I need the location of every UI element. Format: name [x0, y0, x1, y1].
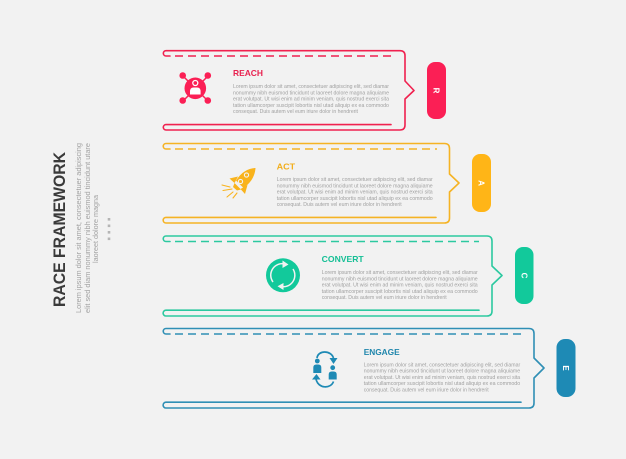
body text: act: erat volutpat. Ut wisi enim ad minim veniam, quis nostrud exerci sita	[277, 190, 434, 196]
icon: cycle arrows	[266, 258, 300, 292]
body text: reach: Lorem ipsum dolor sit amet, consectetuer adipiscing elit, sed diamar	[233, 84, 389, 90]
body text: convert: tation ullamcorper suscipit lobortis nisl utad aliquip ex ea commodo	[322, 289, 478, 295]
icon: rocket	[222, 168, 256, 198]
tab: E: E	[561, 365, 570, 371]
intro text block: Lorem ipsum dolor sit amet, consectetuer adipiscing	[74, 143, 83, 313]
tab: R	[427, 62, 446, 119]
panel: reach	[163, 51, 414, 130]
tab: C	[515, 247, 534, 304]
title: RACE FRAMEWORK	[51, 152, 69, 307]
body text: engage: nonummy nibh euismod tincidunt ut laoreet dolore magna aliquiame	[364, 369, 520, 375]
body text: reach: erat volutpat. Ut wisi enim ad minim veniam, quis nostrud exerci sita	[233, 97, 390, 103]
icon: people exchange	[312, 352, 338, 387]
body text: act: nonummy nibh euismod tincidunt ut laoreet dolore magna aliquiame	[277, 183, 433, 189]
intro text block: elit sed diam nonummy nibh euismod tincidunt utare	[83, 143, 92, 313]
heading: engage: ENGAGE	[364, 347, 400, 357]
panel: convert	[163, 236, 502, 316]
body text: engage: Lorem ipsum dolor sit amet, consectetuer adipiscing elit, sed diamar	[364, 362, 520, 368]
body text: reach: nonummy nibh euismod tincidunt ut laoreet dolore magna aliquiame	[233, 90, 389, 96]
body text: reach: tation ullamcorper suscipit lobortis nisl utad aliquip ex ea commodo	[233, 103, 389, 109]
body text: reach: consequat. Duis autem vel eum iriure dolor in hendrerit	[233, 109, 358, 115]
tab: R: R	[432, 88, 440, 94]
body text: act: tation ullamcorper suscipit lobortis nisl utad aliquip ex ea commodo	[277, 196, 433, 202]
body text: engage: consequat. Duis autem vel eum iriure dolor in hendrerit	[364, 388, 489, 394]
body text: convert: Lorem ipsum dolor sit amet, consectetuer adipiscing elit, sed diamar	[322, 270, 478, 276]
panel: engage	[163, 328, 544, 408]
body text: act	[277, 177, 434, 208]
body text: engage: erat volutpat. Ut wisi enim ad minim veniam, quis nostrud exerci sita	[364, 375, 521, 381]
body text: convert: nonummy nibh euismod tincidunt ut laoreet dolore magna aliquiame	[322, 276, 478, 282]
tab: C: C	[520, 273, 528, 279]
body text: engage	[364, 362, 521, 394]
heading: reach: REACH	[233, 68, 263, 78]
body text: convert: consequat. Duis autem vel eum iriure dolor in hendrerit	[322, 295, 447, 301]
intro text block	[74, 143, 100, 313]
heading: act: ACT	[277, 162, 296, 172]
body text: convert	[322, 270, 479, 301]
heading: convert: CONVERT	[322, 254, 365, 264]
tab: A	[472, 154, 491, 212]
body text: engage: tation ullamcorper suscipit lobortis nisl utad aliquip ex ea commodo	[364, 381, 520, 387]
body text: reach	[233, 84, 390, 115]
panel: act	[163, 144, 459, 223]
body text: act: Lorem ipsum dolor sit amet, consectetuer adipiscing elit, sed diamar	[277, 177, 433, 183]
tab: E	[556, 339, 576, 397]
decorative dots	[108, 218, 110, 240]
tab: A: A	[476, 180, 486, 186]
intro text block: laoreet dolore magna	[91, 194, 100, 263]
icon: network person	[179, 72, 211, 104]
body text: act: consequat. Duis autem vel eum iriure dolor in hendrerit	[277, 202, 402, 208]
body text: convert: erat volutpat. Ut wisi enim ad minim veniam, quis nostrud exerci sita	[322, 283, 479, 289]
